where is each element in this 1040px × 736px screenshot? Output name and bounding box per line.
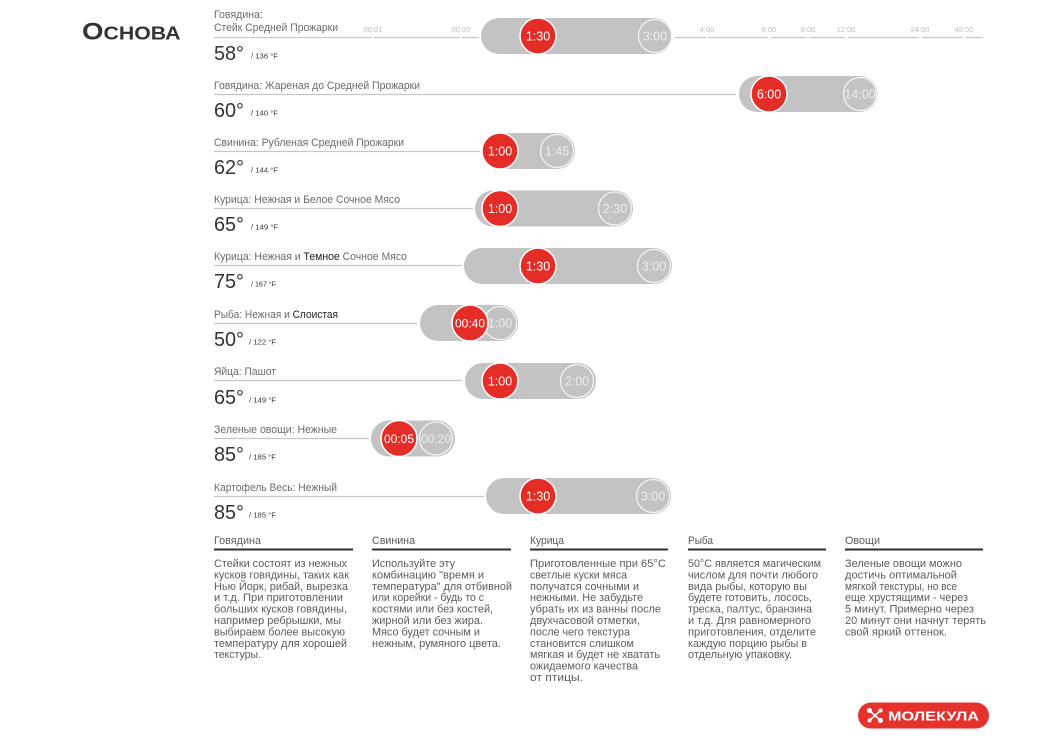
text block: треска, палтус, бранзина: [688, 604, 813, 616]
heading: Курица: [530, 535, 565, 547]
time range bar: 2:00: [565, 374, 589, 388]
text block: получатся сочными и: [530, 581, 639, 593]
text block: двухчасовой отметки,: [530, 615, 640, 627]
text block: [845, 558, 986, 638]
text block: будете готовить, лосось,: [688, 592, 812, 604]
text block: каждую порцию рыбы в: [688, 638, 807, 650]
time range bar: 1:00: [488, 202, 512, 216]
text block: Зеленые овощи можно: [845, 558, 962, 570]
text block: Мясо будет сочным и: [372, 626, 480, 638]
temperature: 60°: [214, 99, 244, 122]
time axis: 00:01: [364, 25, 382, 34]
text block: свой яркий оттенок.: [845, 626, 947, 638]
time range bar: [371, 420, 455, 456]
time range bar: 1:30: [526, 490, 550, 504]
text block: мягкая и будет не хватать: [530, 649, 660, 661]
text block: 5 минут. Примерно через: [845, 604, 974, 616]
leader line: [214, 264, 462, 266]
temperature: 65°: [214, 213, 244, 236]
text block: температура" для отбивной: [372, 581, 512, 593]
temperature: 50°: [214, 328, 244, 351]
temperature: [214, 213, 278, 236]
text block: числом для почти любого: [688, 569, 818, 581]
heading: Свинина: [372, 535, 416, 547]
temperature: / 167 °F: [251, 280, 276, 288]
temperature: / 149 °F: [251, 224, 278, 232]
time axis: 24:00: [911, 25, 929, 34]
temperature: 85°: [214, 443, 244, 466]
time range bar: 00:05: [384, 432, 414, 446]
temperature: / 185 °F: [249, 454, 276, 462]
temperature: 65°: [214, 386, 244, 409]
label: Рыба: Нежная и Слоистая: [214, 309, 338, 321]
temperature: [214, 443, 276, 466]
label: Картофель Весь: Нежный: [214, 482, 337, 494]
text block: температуру для хорошей: [214, 638, 347, 650]
temperature: [214, 501, 276, 524]
text block: и т.д. При приготовлении: [214, 592, 343, 604]
temperature: 62°: [214, 156, 244, 179]
time range bar: 1:00: [488, 316, 512, 330]
text block: достичь оптимальной: [845, 569, 957, 581]
time range bar: [465, 363, 596, 399]
temperature: / 140 °F: [251, 110, 278, 118]
row: fish: [214, 305, 518, 351]
temperature: 85°: [214, 501, 244, 524]
row: poached eggs: [214, 363, 596, 409]
time axis: [214, 25, 983, 38]
text block: светлые куски мяса: [530, 569, 628, 581]
label: Яйца: Пашот: [214, 366, 276, 378]
text block: комбинацию "время и: [372, 569, 484, 581]
time range bar: 1:00: [488, 144, 512, 158]
time range bar: 3:00: [641, 490, 665, 504]
temperature: 75°: [214, 270, 244, 293]
temperature: [214, 42, 278, 65]
label: Курица: Нежная и Темное Сочное Мясо: [214, 251, 407, 263]
time range bar: [475, 190, 633, 226]
icon: molecule: [867, 708, 883, 723]
temperature: [214, 328, 276, 351]
time axis: 8:00: [801, 25, 815, 34]
leader line: [214, 208, 473, 210]
text block: текстуры.: [214, 649, 261, 661]
text block: и т.д. Для равномерного: [688, 615, 811, 627]
time range bar: [481, 18, 672, 54]
temperature: / 185 °F: [249, 512, 276, 520]
text block: Используйте эту: [372, 558, 455, 570]
text block: отдельную упаковку.: [688, 649, 792, 661]
time range bar: 1:30: [526, 30, 550, 44]
text block: после чего текстура: [530, 626, 631, 638]
time range bar: 00:20: [421, 432, 451, 446]
row: pork chop: [214, 133, 575, 179]
text block: от птицы.: [530, 672, 583, 684]
text block: больших кусков говядины,: [214, 604, 347, 616]
leader line: [214, 322, 417, 324]
leader line: [214, 380, 462, 382]
row: chicken dark meat: [214, 248, 672, 293]
logo: [858, 702, 989, 728]
time range bar: 1:45: [545, 144, 569, 158]
time range bar: 14:00: [844, 88, 876, 102]
leader line: [214, 150, 480, 152]
heading: Рыба: [688, 535, 714, 547]
text block: становится слишком: [530, 638, 634, 650]
time range bar: [464, 248, 672, 284]
label: Зеленые овощи: Нежные: [214, 424, 337, 436]
text block: мягкой текстуры, но все: [845, 581, 957, 593]
text block: приготовления, отделите: [688, 626, 816, 638]
time range bar: [420, 305, 518, 341]
panel: beef note: [214, 535, 353, 661]
time axis: 12:00: [837, 25, 855, 34]
text block: выбираем более высокую: [214, 626, 345, 638]
panel: vegetables note: [845, 535, 986, 638]
time axis: 4:00: [700, 25, 714, 34]
row: whole potato: [214, 478, 671, 524]
text block: 50°C является магическим: [688, 558, 821, 570]
text block: нежным, румяного цвета.: [372, 638, 501, 650]
temperature: [214, 99, 278, 122]
text block: жирной или без жира.: [372, 615, 483, 627]
text block: ожидаемого качества: [530, 661, 639, 673]
label: Говядина: Жареная до Средней Прожарки: [214, 80, 420, 92]
temperature: / 149 °F: [249, 396, 276, 404]
row: beef steak: [214, 9, 983, 65]
time range bar: [486, 478, 671, 514]
time range bar: 6:00: [757, 88, 781, 102]
text block: нежными. Не забудьте: [530, 592, 643, 604]
time range bar: 3:00: [642, 260, 666, 274]
text block: [688, 558, 821, 661]
text block: костями или без костей,: [372, 604, 493, 616]
text block: кусков говядины, таких как: [214, 569, 349, 581]
label: Курица: Нежная и Белое Сочное Мясо: [214, 194, 400, 206]
temperature: [214, 386, 276, 409]
panel: chicken note: [530, 535, 668, 684]
temperature: / 144 °F: [251, 166, 278, 174]
heading: Говядина: [214, 535, 262, 547]
temperature: 58°: [214, 42, 244, 65]
label: [214, 9, 338, 34]
text block: или корейки - будь то с: [372, 592, 484, 604]
text block: вида рыбы, которую вы: [688, 581, 807, 593]
temperature: [214, 270, 276, 293]
leader line: [214, 496, 484, 498]
label: Стейк Средней Прожарки: [214, 22, 338, 34]
time axis: 48:00: [955, 25, 973, 34]
text block: [372, 558, 512, 650]
text block: [530, 558, 666, 684]
text block: еще хрустящими - через: [845, 592, 968, 604]
panel: fish note: [688, 535, 826, 661]
leader line: [214, 438, 369, 440]
text block: убрать их из ванны после: [530, 604, 661, 616]
time axis: 00:30: [452, 25, 470, 34]
logo wordmark: МОЛЕКУЛА: [888, 710, 979, 724]
title: ОСНОВА: [82, 18, 180, 46]
text block: Стейки состоят из нежных: [214, 558, 347, 570]
time range bar: 3:00: [643, 30, 667, 44]
temperature: / 136 °F: [251, 52, 278, 60]
temperature: / 122 °F: [249, 338, 276, 346]
text block: Нью Йорк, рибай, вырезка: [214, 580, 349, 593]
label: Свинина: Рубленая Средней Прожарки: [214, 137, 404, 149]
time range bar: 1:00: [488, 374, 512, 388]
time axis: 6:00: [762, 25, 776, 34]
leader line: [214, 94, 736, 96]
text block: Приготовленные при 65°C: [530, 558, 666, 570]
time range bar: 1:30: [526, 260, 550, 274]
text block: [214, 558, 349, 661]
time range bar: 2:30: [603, 202, 627, 216]
temperature: [214, 156, 278, 179]
row: green vegetables: [214, 420, 455, 466]
row: chicken white meat: [214, 190, 633, 236]
text block: например ребрышки, мы: [214, 615, 341, 627]
heading: Овощи: [845, 535, 880, 547]
label: Говядина:: [214, 9, 263, 21]
time range bar: [739, 76, 878, 112]
text block: 20 минут они начнут терять: [845, 615, 986, 627]
panel: pork note: [372, 535, 512, 650]
time range bar: [482, 133, 575, 169]
row: roast beef: [214, 76, 878, 122]
time range bar: 00:40: [455, 316, 485, 330]
